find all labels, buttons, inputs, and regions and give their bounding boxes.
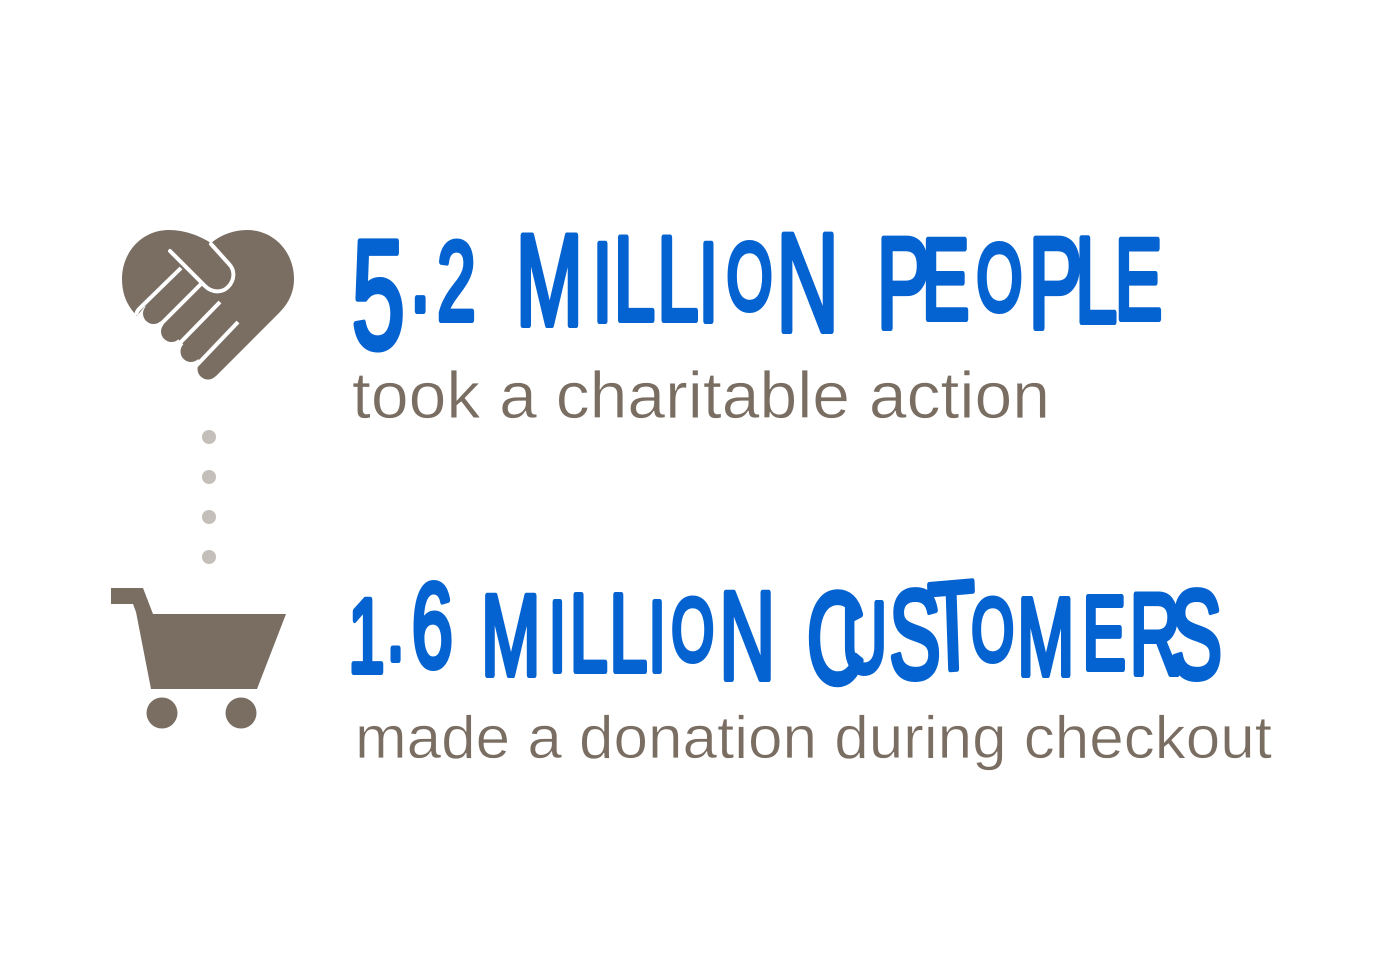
heading: 1.6 million customers: 1 xyxy=(348,577,385,695)
heading: 5.2 million people: 2 xyxy=(437,219,476,344)
heading: 5.2 million people: P xyxy=(1029,210,1082,356)
heading: 1.6 million customers: M xyxy=(1017,576,1074,699)
heading: 5.2 million people: E xyxy=(922,216,969,344)
heading: 5.2 million people: N xyxy=(776,205,839,361)
heading: 1.6 million customers: L xyxy=(609,572,647,695)
heading: 5.2 million people: M xyxy=(516,207,583,353)
heading: 1.6 million customers xyxy=(348,555,1222,711)
heading: 5.2 million people xyxy=(352,204,1162,382)
heading: 5.2 million people: L xyxy=(614,213,655,346)
heading: 1.6 million customers: O xyxy=(972,581,1014,679)
heading: 1.6 million customers: U xyxy=(842,582,887,694)
heading: 1.6 million customers: 6 xyxy=(412,560,453,693)
heading: 5.2 million people: L xyxy=(1075,211,1117,348)
text: took a charitable action: took a charitable action xyxy=(352,358,1050,432)
heading: 1.6 million customers: E xyxy=(1083,574,1126,692)
icon: handshake heart xyxy=(122,230,294,376)
heading: 1.6 million customers: L xyxy=(570,572,608,695)
heading: 5.2 million people: E xyxy=(1115,216,1162,344)
heading: 5.2 million people: L xyxy=(657,213,699,346)
heading: 1.6 million customers: I xyxy=(549,581,566,693)
heading: 1.6 million customers: I xyxy=(649,581,666,693)
heading: 1.6 million customers: T xyxy=(926,555,978,699)
heading: 5.2 million people: 5 xyxy=(352,209,405,382)
heading: 1.6 million customers: . xyxy=(386,564,405,684)
heading: 5.2 million people: I xyxy=(699,220,718,345)
heading: 5.2 million people: . xyxy=(410,204,430,337)
heading: 5.2 million people: O xyxy=(977,223,1022,330)
heading: 1.6 million customers: S xyxy=(1171,566,1222,706)
heading: 1.6 million customers: N xyxy=(719,567,775,707)
heading: 1.6 million customers: O xyxy=(671,581,714,679)
heading: 5.2 million people: I xyxy=(593,220,612,345)
heading: 1.6 million customers: S xyxy=(889,566,941,706)
heading: 1.6 million customers: C xyxy=(807,565,865,711)
icon: shopping cart xyxy=(111,588,286,728)
icon: connecting dots xyxy=(202,430,216,564)
text: made a donation during checkout: made a donation during checkout xyxy=(355,704,1272,771)
heading: 1.6 million customers: R xyxy=(1130,571,1181,699)
heading: 5.2 million people: O xyxy=(727,222,772,329)
heading: 1.6 million customers: M xyxy=(481,572,541,700)
heading: 5.2 million people: P xyxy=(877,210,930,356)
